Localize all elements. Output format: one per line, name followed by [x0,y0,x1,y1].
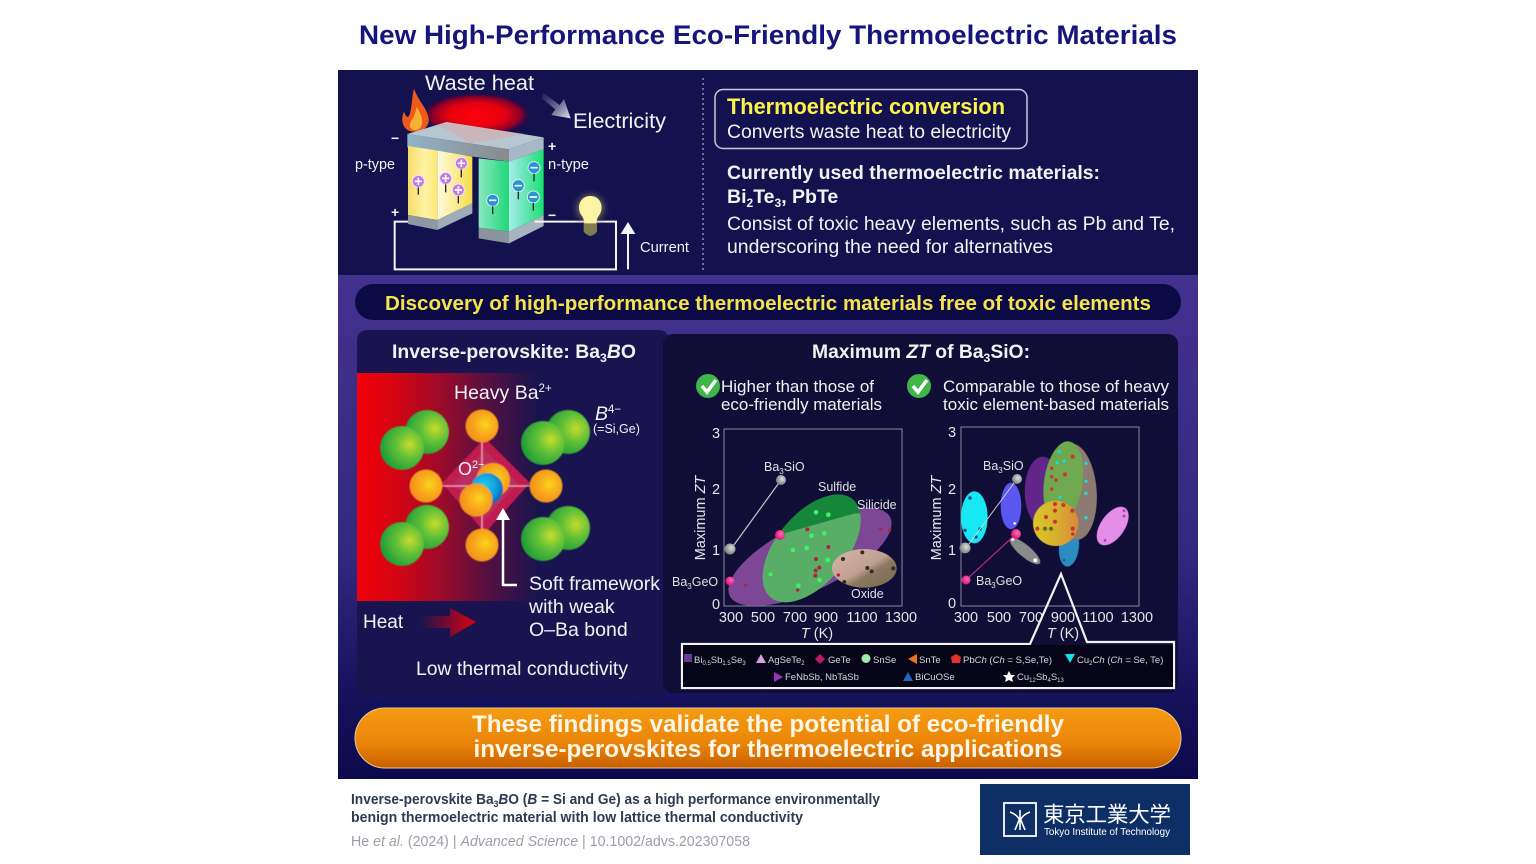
callout: thermoelectric conversion: Thermoelectric conversion [727,94,1005,119]
check text right: Comparable to those of heavy [943,377,1169,396]
y ticks: 1 [712,543,720,559]
polarity signs: − [391,130,399,146]
axis titles: Maximum ZT [693,475,709,560]
conclusion pill: These findings validate the potential of eco-friendly [472,711,1065,738]
text block: currently used materials [727,162,1175,258]
front atom [460,484,492,516]
legend row 1: Bi [694,655,702,666]
red heat gradient [357,373,537,601]
panel: inverse-perovskite structure [357,330,669,697]
check text left [721,377,882,414]
silicide ellipse [715,488,905,626]
n-type leg [479,149,544,243]
waste heat label: Waste heat [425,72,534,95]
text block: currently used materials: Consist of toxic heavy elements, such as Pb and Te, [727,213,1175,235]
y ticks: 2 [712,482,720,498]
heat arrow [420,608,476,637]
legend row 1: SnSe [873,655,896,666]
oxygen atom [471,473,503,505]
heading: O [621,342,636,363]
text block: currently used materials: underscoring the need for alternatives [727,236,1053,258]
x ticks [954,610,1153,626]
text block: currently used materials: Currently used thermoelectric materials: [727,162,1100,184]
legend row 2: Sb [1036,672,1047,683]
check text left: Higher than those of [721,377,874,396]
electricity label: Electricity [573,110,667,133]
legend row 1: GeTe [828,655,851,666]
region labels: Silicide [857,498,897,512]
x ticks: 500 [987,610,1011,626]
citation [351,792,880,850]
point labels: 3 [991,581,996,590]
circuit wire [395,222,616,269]
text block: currently used materials: 2 [746,196,754,210]
check text right [943,377,1169,414]
region labels: 3 [687,582,692,591]
logo emblem [1004,803,1036,836]
silicide points [744,527,891,592]
legend row 2: BiCuOSe [915,672,955,683]
region labels: 3 [779,467,784,476]
soft framework arrow [496,508,517,586]
sulfide ellipse [744,477,880,620]
axis titles: T (K) [801,626,833,642]
orange atoms [410,410,562,562]
panel: main background [338,70,1198,779]
y ticks: 1 [948,543,956,559]
legend row 1: Se [731,655,742,666]
legend row 1: 3 [742,661,746,667]
data series Ba3GeO [726,530,785,586]
light bulb [570,188,611,236]
legend row 1: SnTe [919,655,941,666]
citation: Inverse-perovskite Ba [351,792,502,808]
hole arrows and signs [415,160,465,203]
citation: O (B = Si and Ge) as a high performance environmentally [508,792,899,808]
check text left: eco-friendly materials [721,395,882,414]
n-type label: n-type [548,157,589,173]
check text right: toxic element-based materials [943,395,1169,414]
y ticks [712,426,720,613]
panel: inverse-perovskite structure: O–Ba bond [529,619,628,641]
legend row 1: Ch [1092,655,1105,666]
point labels: 3 [998,466,1003,475]
citation: B [498,792,508,808]
x ticks [719,610,917,626]
x ticks: 900 [1051,610,1075,626]
barium and silicon atoms [380,410,590,566]
heat label: Heat [363,612,404,633]
icon: check right [907,374,931,398]
panel: maximum ZT [663,334,1178,693]
x ticks: 700 [783,610,807,626]
x ticks: 300 [954,610,978,626]
y ticks [948,425,956,612]
region labels [672,460,897,601]
holes [412,157,467,196]
x ticks: 700 [1019,610,1043,626]
text block: currently used materials: Bi [727,186,746,208]
legend row 1: Cu [1077,655,1089,666]
legend row 2: S [1051,672,1057,683]
oxygen label: 2− [472,459,485,471]
region labels: Ba [672,575,687,589]
top bridge [407,122,544,162]
x ticks: 900 [814,610,838,626]
icon: check left [696,374,720,398]
x ticks: 1100 [1082,610,1114,626]
heading: Maximum ZT of Ba [812,342,983,363]
region labels: SiO [784,460,805,474]
overlap region [762,514,861,602]
data series Ba3SiO [960,474,1022,554]
legend row 1: PbCh (Ch = S,Se,Te) [963,655,1052,666]
callout: thermoelectric conversion [715,90,1027,148]
dark points [963,496,1125,561]
heading: 3 [600,351,607,365]
white points [1011,522,1037,562]
legend row 2: 4 [1047,678,1051,684]
title: New High-Performance Eco-Friendly Thermoelectric Materials [359,20,1177,50]
x ticks: 1300 [885,610,917,626]
point labels: GeO [996,574,1022,588]
current label: Current [640,240,689,256]
legend row 1: 0.5 [702,661,711,667]
heading: 3 [984,351,991,365]
red heat glow [420,92,532,138]
region labels: Sulfide [818,480,856,494]
panel: inverse-perovskite structure: with weak [528,596,615,618]
heavy Ba label: 2+ [539,383,552,395]
y ticks: 0 [712,597,720,613]
p-type leg [408,146,472,230]
current arrow [621,222,635,269]
panel: lower section background [338,275,1198,779]
x ticks: 1100 [846,610,878,626]
text block: currently used materials: , PbTe [781,186,838,208]
y ticks: 3 [948,425,956,441]
cyan points [1056,450,1088,519]
axis titles: Maximum ZT [929,475,945,560]
citation: 3 [494,799,498,809]
legend row 1: Sb [711,655,722,666]
logo text English: Tokyo Institute of Technology [1044,826,1171,838]
p-type label: p-type [355,157,395,173]
point labels: SiO [1003,459,1024,473]
heading: Inverse-perovskite: Ba [392,342,596,363]
polarity signs: + [391,204,399,220]
legend row 1: 1.5 [722,661,731,667]
x ticks: 500 [751,610,775,626]
data series Ba3GeO [962,529,1021,584]
octahedron diamond [442,438,530,533]
legend row 1 [684,654,1163,667]
axis titles [929,475,1079,642]
point labels: Ba [976,574,991,588]
banner: discovery heading: Discovery of high-performance thermoelectric materials free of toxic elements [385,292,1151,315]
chart: right scatter [929,425,1153,642]
conclusion pill: inverse-perovskites for thermoelectric applications [474,736,1062,763]
flame icon [402,88,429,132]
legend row 2: 12 [1029,678,1036,684]
legend row 1: (Ch = Se, Te) [1107,655,1163,666]
heading: SiO: [990,342,1030,363]
banner: discovery heading [355,284,1181,320]
legend row 2: 13 [1057,678,1064,684]
B site label: B [595,403,608,425]
callout: thermoelectric conversion: Converts waste heat to electricity [727,121,1011,143]
legend row 2: Cu [1017,672,1029,683]
low thermal conductivity: Low thermal conductivity [416,658,628,680]
y ticks: 2 [948,482,956,498]
heavy Ba label: Heavy Ba [454,382,539,404]
legend row 1: 2 [1089,661,1093,667]
heading: B [607,342,621,363]
logo text Japanese: 東京工業大学 [1043,803,1171,827]
electrons [487,162,540,206]
region labels: Ba [764,460,779,474]
axis titles: T (K) [1047,626,1079,642]
region labels: GeO [692,575,718,589]
crystal structure [380,410,590,566]
oxide ellipse [832,549,897,588]
legend with callout pointer [682,574,1174,688]
y ticks: 3 [712,426,720,442]
legend row 1: 2 [801,661,805,667]
thermoelectric device diagram [355,72,689,269]
citation: benign thermoelectric material with low lattice thermal conductivity [351,810,803,826]
oxygen label: O [458,459,472,479]
polarity signs: − [548,207,556,223]
text block: currently used materials: Te [753,186,775,208]
Si Ge label: (=Si,Ge) [593,422,640,436]
logo: Tokyo Institute of Technology [980,784,1190,855]
material ellipses [961,439,1135,568]
text block: currently used materials: 3 [774,196,782,210]
oxide points [841,550,895,584]
electricity arrow [542,93,571,118]
data series Ba3SiO [724,475,786,554]
legend row 2: FeNbSb, NbTaSb [785,672,859,683]
polarity signs [391,130,556,223]
conclusion pill [355,708,1181,768]
legend row 2 [774,671,1064,684]
material points [1035,455,1075,536]
region labels: Oxide [851,587,884,601]
y ticks: 0 [948,596,956,612]
chart: left scatter [672,426,917,642]
point labels: Ba [983,459,998,473]
polarity signs: + [548,138,556,154]
sulfide points [769,510,831,588]
axis titles [693,475,833,642]
point labels [976,459,1024,590]
x ticks: 1300 [1121,610,1153,626]
soft framework text: Soft framework [529,573,660,595]
citation: He et al. (2024) | Advanced Science | 10.1002/advs.202307058 [351,834,750,850]
electron arrows and signs [489,168,538,214]
x ticks: 300 [719,610,743,626]
B site label: 4− [608,404,621,416]
divider: dotted [702,78,704,270]
legend row 1: AgSeTe [768,655,801,666]
